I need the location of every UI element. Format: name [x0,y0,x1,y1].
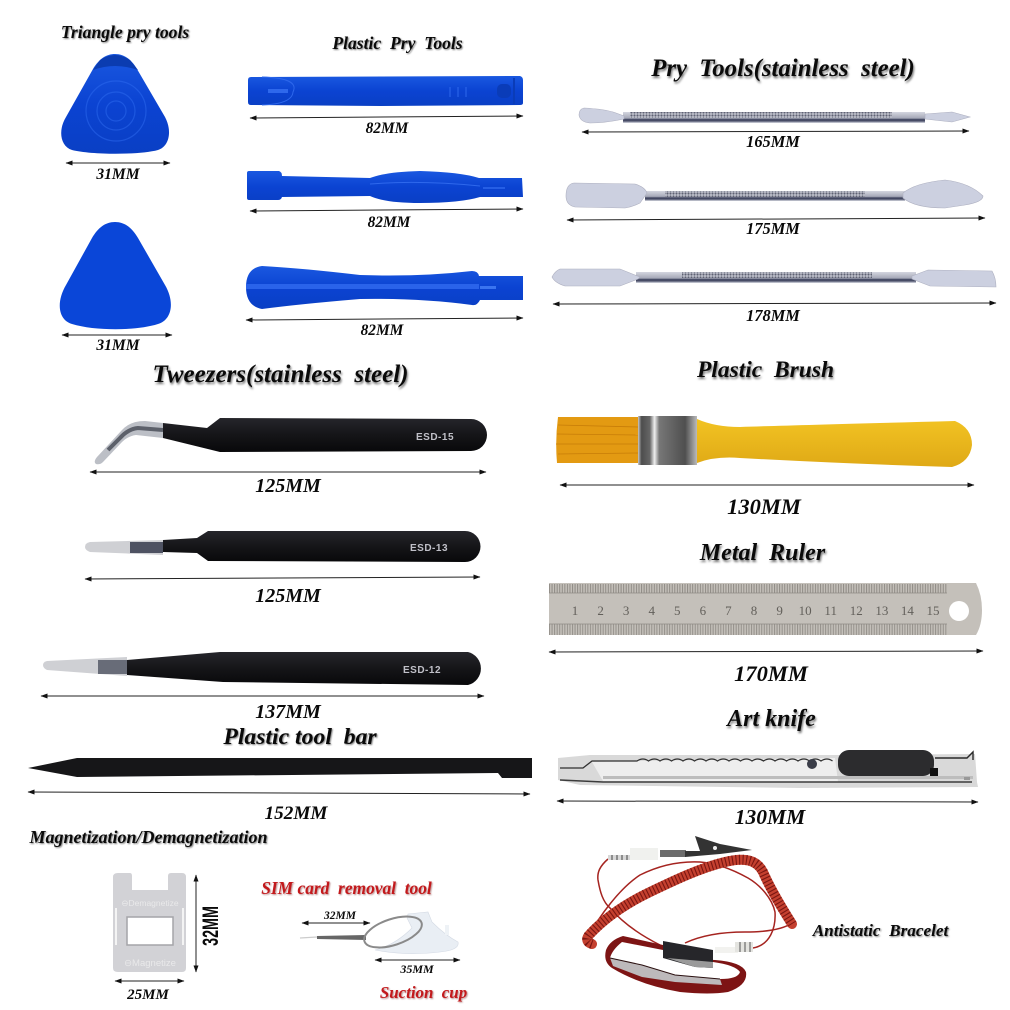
dimension: 32mm height: 32MM [198,906,223,946]
icon: steel ruler: 12 [850,603,863,618]
icon: ESD-12 straight tweezers [43,652,481,685]
dimension: 31mm: 31MM [95,166,141,183]
icon: 165mm steel pry tool [579,108,970,123]
panel: SIM tool and suction cup [261,878,467,1002]
icon: blue wide-handle pry bar [246,266,523,309]
dimension: 35mm cup [375,960,460,976]
icon: 175mm steel pry tool [566,180,983,208]
icon: ESD-15 curved tweezers [95,418,487,464]
dimension: 32mm pin [302,910,370,923]
panel: triangle pry tools [60,22,189,354]
icon: yellow handled brush [556,416,972,467]
heading: pry tools stainless steel: Pry Tools(stainless steel) [650,55,915,82]
icon: steel ruler: 7 [725,603,732,618]
icon: ESD-13 straight tweezers: ESD-13 [410,543,448,554]
heading: art knife: Art knife [725,706,816,732]
heading: plastic tool bar: Plastic tool bar [222,724,377,750]
icon: steel ruler: 5 [674,603,681,618]
heading: plastic pry tools: Plastic Pry Tools [331,33,463,53]
dimension: 82mm: 82MM [361,322,405,339]
icon: steel ruler: 11 [824,603,837,618]
icon: ESD-15 curved tweezers: ESD-15 [416,432,454,443]
panel: plastic tool bar [28,724,532,824]
icon: steel ruler: 4 [648,603,655,618]
heading: SIM card removal tool: SIM card removal tool [261,878,432,898]
icon: flat blue pry bar [248,76,523,106]
icon: steel ruler: 8 [751,603,757,618]
dimension: 130mm: 130MM [727,494,802,519]
panel: metal ruler [549,540,983,686]
heading: metal ruler: Metal Ruler [699,540,826,566]
icon: steel ruler: 3 [623,603,629,618]
heading: triangle pry tools: Triangle pry tools [61,22,189,42]
dimension: 35mm cup: 35MM [399,962,434,976]
dimension: 25mm width [115,981,184,1003]
icon: black spudger bar [28,758,532,778]
icon: steel ruler: 15 [926,603,940,618]
icon: grey magnetizer block: ⊖Magnetize [124,958,176,969]
icon: steel ruler: 13 [875,603,888,618]
icon: grey magnetizer block [113,873,186,972]
dimension: 152mm: 152MM [265,803,328,824]
dimension: 31mm [62,335,172,354]
icon: antistatic wrist strap [586,836,792,994]
icon: steel ruler: 14 [901,603,914,618]
icon: suction cup [375,912,458,954]
panel: tweezers [41,361,487,723]
label: antistatic bracelet: Antistatic Bracelet [812,921,950,940]
panel: antistatic bracelet [586,836,950,994]
dimension: 170mm: 170MM [734,661,809,686]
dimension: 125mm: 125MM [255,585,322,607]
icon: grey magnetizer block: ⊖Demagnetize [121,898,179,908]
icon: 178mm steel pry tool [552,269,996,287]
dimension: 31mm: 31MM [95,337,141,354]
icon: SIM pin and ring [300,910,426,954]
panel: stainless steel pry tools [552,55,996,325]
dimension: 32mm height [196,875,223,972]
heading: suction cup: Suction cup [380,983,467,1002]
dimension: 175mm: 175MM [746,219,801,238]
icon: steel ruler: 2 [597,603,604,618]
panel: plastic pry tools [246,33,523,339]
icon: steel ruler [549,583,982,635]
icon: plain blue triangle pick [60,222,171,329]
icon: ribbed blue triangle pick [61,54,169,154]
icon: ESD-13 straight tweezers [85,531,480,562]
panel: magnetizer [28,827,268,1003]
icon: snap-off art knife [558,750,978,788]
icon: steel ruler: 6 [700,603,707,618]
icon: ESD-12 straight tweezers: ESD-12 [403,665,441,676]
dimension: 25mm width: 25MM [126,987,169,1003]
heading: plastic brush: Plastic Brush [696,357,834,383]
dimension: 125mm: 125MM [255,475,322,497]
dimension: 82mm: 82MM [368,214,412,231]
dimension: 32mm pin: 32MM [323,910,357,922]
dimension: 137mm: 137MM [255,701,322,723]
dimension: 165mm: 165MM [746,132,801,151]
icon: steel ruler: 9 [776,603,783,618]
icon: steel ruler: 10 [799,603,812,618]
icon: steel ruler: 1 [572,603,578,618]
panel: art knife [557,706,978,829]
dimension: 130mm: 130MM [735,805,806,829]
dimension: 31mm [66,163,170,183]
dimension: 178mm: 178MM [746,306,801,325]
icon: blue pry bar with grip [247,171,523,203]
heading: tweezers stainless steel: Tweezers(stainless steel) [153,361,408,388]
panel: plastic brush [556,357,974,519]
heading: magnetization demagnetization: Magnetization/Demagnetization [28,827,268,847]
dimension: 82mm: 82MM [366,120,410,137]
